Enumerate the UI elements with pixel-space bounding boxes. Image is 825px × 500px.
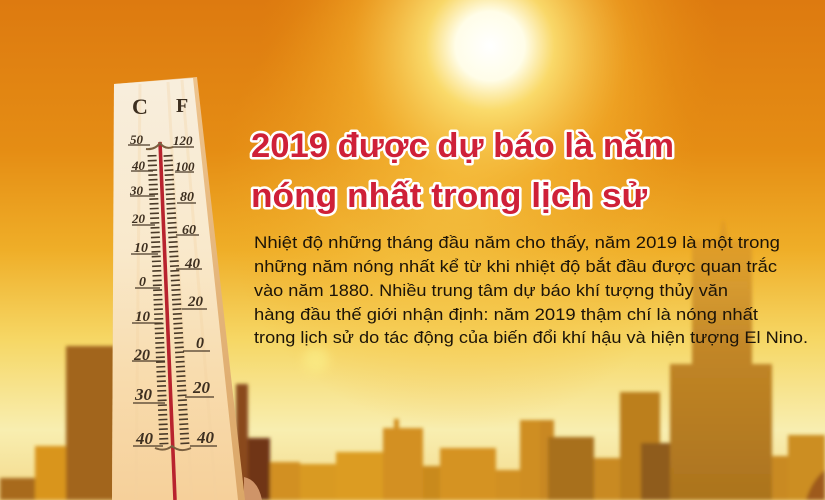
celsius labels: 10 — [134, 241, 148, 256]
body text: vào năm 1880. Nhiều trung tâm dự báo khí tượng thủy văn — [254, 281, 728, 300]
city skyline — [0, 220, 825, 500]
celsius labels: 30 — [129, 183, 144, 198]
celsius labels: 40 — [135, 429, 154, 448]
fahrenheit labels: 20 — [187, 294, 204, 310]
C and F headings — [132, 94, 188, 119]
body text: những năm nóng nhất kể từ khi nhiệt độ bắt đầu được quan trắc — [254, 257, 778, 276]
fahrenheit labels: 120 — [173, 133, 193, 148]
right buildings — [540, 220, 825, 500]
fahrenheit labels: 60 — [182, 223, 196, 238]
fahrenheit labels: 20 — [192, 378, 210, 397]
celsius labels: 0 — [139, 275, 146, 290]
body text: trong lịch sử do tác động của biến đổi khí hậu và hiện tượng El Nino. — [254, 328, 808, 347]
fahrenheit labels: 80 — [180, 190, 194, 205]
celsius labels: 10 — [135, 309, 150, 325]
celsius labels: 40 — [131, 158, 146, 173]
celsius labels: 30 — [134, 385, 152, 404]
hand behind thermometer — [244, 477, 262, 500]
red mercury column — [160, 142, 175, 500]
fahrenheit labels: 0 — [196, 335, 204, 352]
body text: hàng đầu thế giới nhận định: năm 2019 thậm chí là nóng nhất — [254, 305, 758, 324]
celsius labels — [129, 132, 154, 448]
fahrenheit labels: 100 — [175, 159, 195, 174]
major scale lines — [128, 145, 217, 446]
fahrenheit labels — [173, 133, 214, 447]
left buildings — [0, 346, 120, 500]
celsius labels: 20 — [133, 347, 150, 364]
top and bottom clips — [146, 143, 191, 450]
C and F headings: F — [176, 95, 188, 117]
body text — [254, 233, 808, 347]
title: 2019 được dự báo là năm — [251, 127, 674, 165]
title: nóng nhất trong lịch sử — [251, 177, 647, 215]
thermometer — [112, 77, 262, 500]
scale ticks — [152, 155, 185, 445]
celsius labels: 20 — [131, 211, 146, 226]
wooden board — [112, 77, 245, 500]
body text: Nhiệt độ những tháng đầu năm cho thấy, năm 2019 là một trong — [254, 233, 780, 252]
celsius labels: 50 — [130, 132, 144, 147]
title — [251, 127, 674, 215]
fahrenheit labels: 40 — [184, 256, 200, 272]
centre buildings — [236, 384, 552, 500]
C and F headings: C — [132, 94, 148, 119]
fahrenheit labels: 40 — [196, 428, 214, 447]
